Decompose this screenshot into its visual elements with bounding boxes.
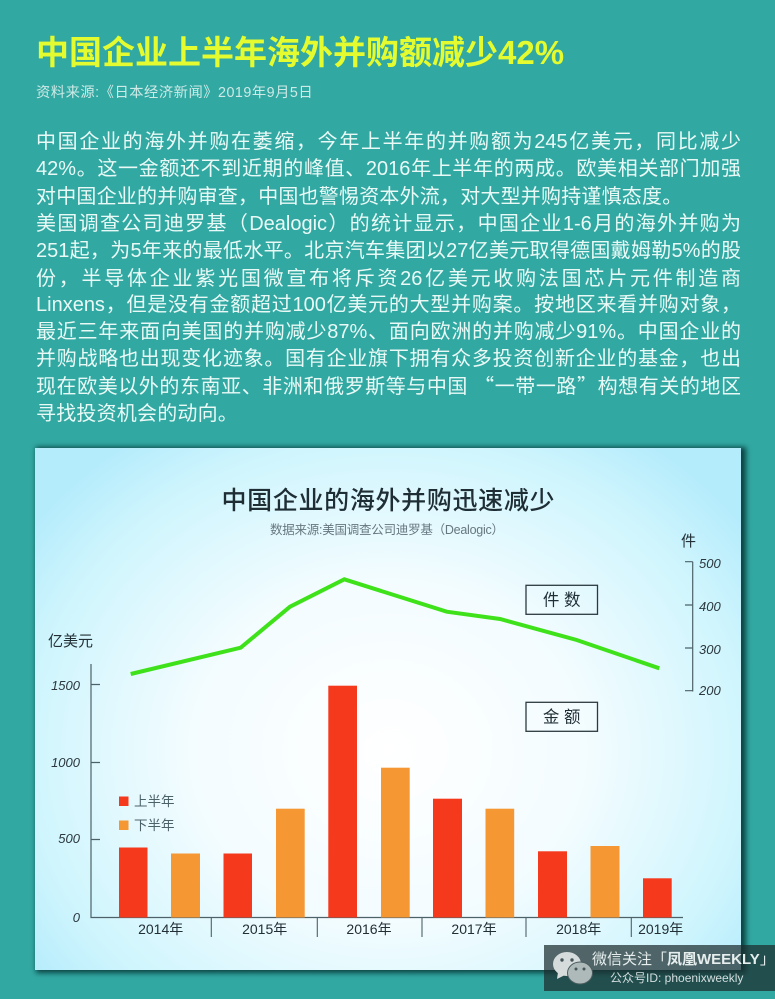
right axis: 500 [699, 556, 721, 571]
body text: 最近三年来面向美国的并购减少87%、面向欧洲的并购减少91%。中国企业的 [36, 321, 741, 343]
watermark bar [544, 945, 775, 991]
watermark id: 公众号ID: phoenixweekly [610, 971, 743, 985]
body text: 并购战略也出现变化迹象。国有企业旗下拥有众多投资创新企业的基金，也出 [36, 348, 741, 370]
label box: deal count: 件 数 [543, 590, 581, 610]
body text: 现在欧美以外的东南亚、非洲和俄罗斯等与中国 “一带一路”构想有关的地区 [36, 370, 741, 399]
x axis year labels: 2014年 [138, 921, 183, 937]
x axis year labels [138, 918, 683, 937]
body text [36, 130, 741, 425]
body text: 美国调查公司迪罗基（Dealogic）的统计显示，中国企业1-6月的海外并购为 [36, 213, 741, 235]
body text: 42%。这一金额还不到近期的峰值、2016年上半年的两成。欧美相关部门加强 [36, 158, 741, 180]
body text: Linxens，但是没有金额超过100亿美元的大型并购案。按地区来看并购对象， [36, 294, 741, 316]
left axis: 0 [73, 910, 81, 925]
x axis year labels: 2019年 [638, 921, 683, 937]
body text: 中国企业的海外并购在萎缩，今年上半年的并购额为245亿美元，同比减少 [36, 131, 741, 153]
x axis year labels: 2016年 [346, 921, 392, 937]
x axis year labels: 2017年 [451, 921, 497, 937]
label box: amount: 金 额 [543, 708, 581, 726]
left axis unit: 亿美元 [48, 633, 93, 650]
right axis unit: 件 [681, 533, 696, 550]
right axis: 400 [699, 599, 721, 614]
bars: first half [119, 686, 672, 918]
line: deal count [131, 579, 659, 674]
body text: 份，半导体企业紫光国微宣布将斥资26亿美元收购法国芯片元件制造商 [36, 268, 741, 290]
source line: 资料来源:《日本经济新闻》2019年9月5日 [36, 85, 313, 101]
legend: 上半年 [134, 794, 174, 809]
right axis [685, 556, 721, 698]
icon: chat bubbles [553, 952, 593, 984]
x axis year labels: 2018年 [556, 921, 601, 937]
watermark title: 微信关注「凤凰WEEKLY」 [592, 951, 775, 968]
body text: 251起，为5年来的最低水平。北京汽车集团以27亿美元取得德国戴姆勒5%的股 [36, 240, 741, 262]
body text: 寻找投资机会的动向。 [36, 403, 238, 425]
left axis [51, 664, 683, 925]
x axis year labels: 2015年 [242, 921, 287, 937]
label box: deal count [526, 585, 598, 614]
left axis: 500 [58, 831, 81, 846]
panel: chart background [35, 448, 741, 970]
right axis: 200 [698, 683, 721, 698]
left axis: 1500 [51, 678, 81, 693]
legend: 下半年 [134, 818, 174, 833]
left axis: 1000 [51, 755, 81, 770]
bars: second half [171, 768, 620, 918]
legend [119, 794, 174, 833]
chart source: 数据来源:美国调查公司迪罗基（Dealogic） [270, 522, 504, 537]
label box: amount [526, 702, 598, 731]
title: 中国企业上半年海外并购额减少42% [36, 34, 564, 71]
right axis: 300 [699, 642, 721, 657]
chart title: 中国企业的海外并购迅速减少 [222, 487, 554, 515]
body text: 对中国企业的并购审查，中国也警惕资本外流，对大型并购持谨慎态度。 [36, 186, 682, 208]
